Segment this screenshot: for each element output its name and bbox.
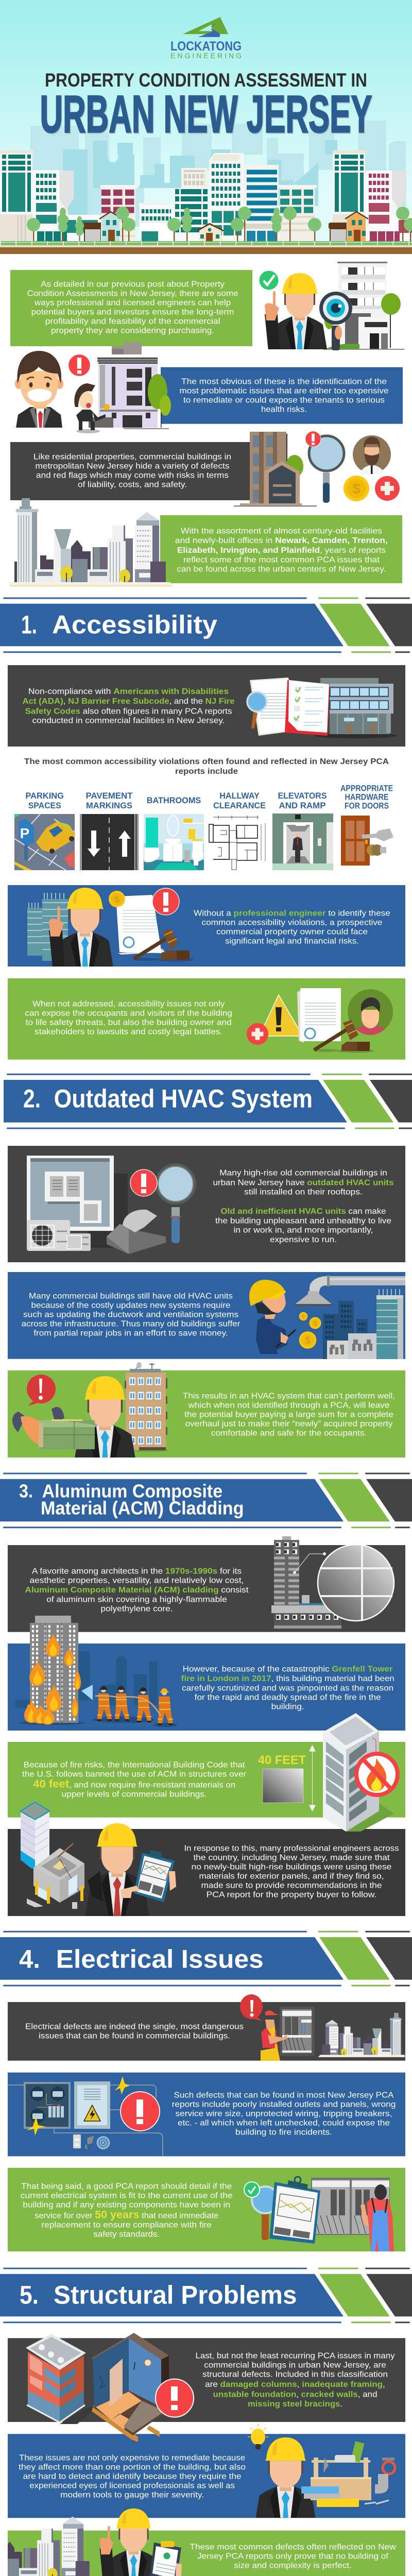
- panel: outdated HVAC: the building unpleasant and unhealthy to live: [215, 1216, 391, 1225]
- section header 5: 5.: [20, 2281, 39, 2310]
- section header 5: Structural Problems: [54, 2281, 297, 2310]
- icon: parking lot: P: [20, 825, 29, 841]
- panel: old HVAC units: across the infrastructure. Thus many old buildings suffer: [22, 1319, 241, 1328]
- panel: urban centers: Elizabeth, Irvington, and Plainfield , years of reports: [177, 546, 386, 555]
- section header 4: Electrical Issues: [56, 1944, 264, 1973]
- section header 3: [0, 1472, 412, 1528]
- blue striped building: [244, 165, 279, 241]
- panel: outdated HVAC: Many high-rise old commercial buildings in: [219, 1168, 387, 1177]
- panel: engineers respond: PCA report for the property buyer to follow.: [207, 1890, 376, 1899]
- left tower group: [0, 150, 101, 241]
- illustration: building, magnifier and icons: $: [352, 481, 360, 497]
- illustration: building, magnifier and icons: [234, 431, 400, 507]
- panel: defects and red flags: and red flags which may come with risks in terms: [36, 471, 229, 480]
- panel: without a professional engineer: [8, 885, 405, 967]
- item: appropriate hardware for doors: HARDWARE: [345, 792, 388, 802]
- section header 3: 3.: [19, 1481, 33, 1502]
- panel: structural problems: missing steel bracings .: [248, 2400, 342, 2409]
- panel: most common defects: size and complexity is perfect.: [234, 2561, 352, 2570]
- panel: hard to detect: are hard to detect and identify because they require the: [23, 2472, 242, 2481]
- section header 3: Aluminum Composite: [42, 1481, 222, 1502]
- panel: defects in PCA: building to fire incidents.: [235, 2128, 332, 2137]
- panel: ACM cladding: A favorite among architects in the 1970s-1990s for its: [32, 1567, 242, 1575]
- illustration: engineer inspecting building: [260, 262, 404, 350]
- panel: non-compliance: conducted in commercial facilities in New Jersey.: [32, 717, 225, 725]
- heading: common accessibility violations: [24, 757, 389, 776]
- icon: door and hardware: [341, 816, 393, 866]
- panel: defects in PCA: Such defects that can be found in most New Jersey PCA: [174, 2091, 394, 2099]
- panel: Grenfell Tower: However, because of the catastrophic Grenfell Tower: [183, 1665, 393, 1673]
- icon: elevator: [272, 814, 333, 870]
- icon: bathroom: [144, 814, 204, 870]
- panel: Grenfell Tower: building.: [271, 1702, 304, 1711]
- panel: defects in PCA: [8, 2073, 405, 2156]
- section header 1: 1.: [21, 610, 37, 639]
- panel: hard to detect: modern tools to gauge their severity.: [60, 2490, 204, 2499]
- panel: defects and red flags: of liability, costs, and safety.: [78, 480, 187, 489]
- item: bathrooms: [144, 795, 204, 870]
- panel: good PCA report: current electrical system is fit to the current use of the: [21, 2191, 233, 2200]
- panel: defects in PCA: service wire size, unprotected wiring, tripping breakers,: [175, 2109, 392, 2118]
- panel: when not addressed: to life safety threats, but also the building owner and: [26, 1018, 232, 1027]
- panel: non-compliance: Non-compliance with Americans with Disabilities: [28, 687, 229, 696]
- illustration: room with cracks and warning: [92, 2333, 194, 2442]
- icon: road arrows: [80, 814, 138, 870]
- panel: defects in PCA: etc. - all which when left unchecked, could expose the: [178, 2119, 390, 2127]
- panel: engineers respond: [8, 1802, 405, 1923]
- panel: without a professional engineer: Without a professional engineer to identify these: [194, 909, 390, 918]
- panel: structural problems: [8, 2334, 405, 2424]
- panel: outdated HVAC: [8, 1146, 405, 1262]
- skyline: far layer: [30, 121, 406, 227]
- section header 2: 2.: [23, 1084, 41, 1113]
- house: cream centre: [197, 223, 224, 243]
- panel: outdated HVAC: still installed on their rooftops.: [244, 1188, 363, 1196]
- illustration: city skyline: [10, 498, 173, 587]
- panel: structural problems: commercial buildings in urban New Jersey, are: [204, 2361, 386, 2370]
- panel: defects and red flags: Like residential properties, commercial buildings in: [33, 452, 231, 461]
- section header 5: [0, 2268, 412, 2323]
- panel: old HVAC units: Many commercial buildings still have old HVAC units: [29, 1292, 233, 1300]
- panel: 40 feet code: 40 feet, and now require fire-resistant materials on: [33, 1778, 235, 1790]
- panel: ACM cladding: Aluminum Composite Material (ACM) cladding consist: [25, 1586, 249, 1595]
- heading: common accessibility violations: The most common accessibility violations often found and reflected in New Jersey PCA: [24, 757, 389, 766]
- panel: most common defects: Jersey PCA reports only prove that no building of: [197, 2552, 389, 2561]
- panel: hard to detect: These issues are not only expensive to remediate because: [19, 2453, 245, 2462]
- panel: when not addressed: When not addressed, accessibility issues not only: [32, 999, 225, 1008]
- panel: electrical defects: issues that can be found in commercial buildings.: [39, 2031, 230, 2040]
- panel: old HVAC units: from partial repair jobs in an effort to save money.: [33, 1329, 228, 1337]
- illustration: office and checklist: [247, 677, 397, 738]
- panel: 40 feet code: Because of fire risks, the International Building Code that: [24, 1760, 245, 1769]
- illustration: report, panels and inspector: [244, 2177, 394, 2251]
- illustration: tower on fire and firefighters: [15, 1616, 177, 1727]
- panel: non-compliance: [8, 665, 405, 747]
- item: parking spaces: [14, 791, 75, 870]
- illustration: man with mask and worried owner: [15, 342, 171, 433]
- panel: without a professional engineer: common accessibility violations, a prospective: [202, 918, 383, 927]
- sample cladding panel: [263, 1769, 303, 1803]
- right tower group: [333, 150, 412, 241]
- panel: non-compliance: Safety Codes also often figures in many PCA reports: [25, 707, 232, 716]
- trees: [27, 207, 412, 244]
- section header 1: Accessibility: [52, 610, 217, 639]
- panel: intro green: ways professional and licensed engineers can help: [34, 298, 231, 307]
- item: elevators and ramp: [272, 791, 333, 870]
- illustration: isometric tower, no fire symbol: [323, 1713, 398, 1832]
- panel: most obvious issues: [161, 367, 403, 424]
- panel: most obvious issues: health risks.: [261, 405, 307, 414]
- panel: intro green: property they are considering purchasing.: [51, 326, 214, 335]
- panel: when not addressed: stakeholders to lawsuits and costly legal battles.: [35, 1027, 222, 1036]
- illustration: warning, document and gavel: [247, 988, 393, 1053]
- panel: outdated HVAC: urban New Jersey have outdated HVAC units: [213, 1178, 394, 1187]
- panel: Grenfell Tower: for the rapid and deadly spread of the fire in the: [195, 1693, 381, 1702]
- section header 4: 4.: [19, 1944, 40, 1973]
- illustration: electrician and city: [240, 1994, 405, 2061]
- panel: hard to detect: they affect more than one portion of the building, but also: [19, 2463, 246, 2471]
- panel: old HVAC units: such as updating the ductwork and ventilation systems: [23, 1310, 238, 1319]
- panel: poorly performing HVAC: This results in an HVAC system that can’t perform well,: [183, 1392, 395, 1400]
- panel: most obvious issues: The most obvious of these is the identification of the: [181, 377, 387, 386]
- illustration: engineer, money and building: [12, 1362, 169, 1458]
- panel: poorly performing HVAC: [8, 1362, 405, 1458]
- item: bathrooms: BATHROOMS: [147, 795, 201, 805]
- panel: defects and red flags: [10, 442, 250, 500]
- beige building right: [279, 185, 317, 241]
- white centre building: [139, 203, 174, 241]
- section header 1: [0, 598, 412, 653]
- tall white building: [209, 153, 244, 241]
- panel: structural problems: structural defects. Included in this classification: [202, 2370, 388, 2379]
- panel: defects in PCA: reports include poorly installed outlets and panels, wrong: [172, 2100, 396, 2109]
- illustration: engineer and tools: [248, 2424, 397, 2518]
- item: appropriate hardware for doors: [340, 784, 393, 866]
- panel: engineers respond: no newly-built high-rise buildings were using these: [192, 1862, 392, 1871]
- panel: poorly performing HVAC: the potential buyer paying a large sum for a complete: [184, 1410, 393, 1419]
- illustration: engineer and legal document: [27, 888, 194, 967]
- panel: electrical defects: [8, 1994, 405, 2061]
- panel: urban centers: reflect some of the most common PCA issues that: [183, 555, 380, 564]
- panel: engineers respond: materials for exterior panels, and if they find so,: [199, 1872, 384, 1880]
- logo: Lockatong top: [170, 17, 242, 60]
- panel: Grenfell Tower: [8, 1616, 405, 1731]
- panel: engineers respond: the country, including New Jersey, made sure that: [194, 1853, 390, 1862]
- item: appropriate hardware for doors: APPROPRIATE: [340, 784, 393, 793]
- illustration: engineer with checklist and city: [8, 2509, 182, 2576]
- logo: Lockatong top: LOCKATONG: [170, 39, 242, 54]
- illustration: isometric building: [26, 2334, 98, 2424]
- panel: good PCA report: service for over 50 years that need immediate: [35, 2209, 218, 2221]
- magenta window building: [100, 185, 139, 241]
- panel: structural problems: unstable foundation , cracked walls , and: [213, 2390, 377, 2399]
- panel: ACM cladding: polyethylene core.: [101, 1605, 173, 1614]
- panel: good PCA report: safety standards.: [93, 2230, 160, 2239]
- item: pavement markings: PAVEMENT: [85, 791, 133, 801]
- panel: urban centers: With the assortment of almost century-old facilities: [181, 527, 382, 535]
- panel: engineers respond: made sure to provide recommendations in the: [201, 1881, 382, 1890]
- panel: good PCA report: That being said, a good PCA report should detail if the: [21, 2182, 232, 2191]
- item: parking spaces: SPACES: [28, 801, 61, 810]
- panel: without a professional engineer: significant legal and financial risks.: [225, 937, 359, 945]
- panel: engineers respond: In response to this, many professional engineers across: [184, 1844, 399, 1853]
- item: elevators and ramp: ELEVATORS: [278, 791, 327, 801]
- item: hallway clearance: HALLWAY: [219, 791, 260, 801]
- panel: urban centers: can be found across the urban centers of New Jersey.: [177, 565, 386, 573]
- panel: poorly performing HVAC: which when not identified through a PCA, will leave: [187, 1401, 390, 1410]
- illustration: building and cladding lens: [271, 1536, 394, 1629]
- hero: sky and city: [0, 0, 412, 254]
- icon: parking lot: [14, 814, 75, 870]
- section header 2: [4, 1074, 412, 1129]
- panel: Grenfell Tower: carefully scrutinized and was pinpointed as the reason: [182, 1684, 393, 1692]
- panel: 40 feet code: upper levels of commercial buildings.: [62, 1790, 207, 1799]
- panel: most obvious issues: to remediate or could expose the tenants to serious: [183, 396, 385, 404]
- panel: intro green: profitability and feasibility of the commercial: [45, 317, 220, 326]
- item: hallway clearance: [209, 791, 266, 870]
- label: 40 feet: 40 FEET: [258, 1753, 306, 1767]
- heading: common accessibility violations: reports include: [175, 767, 238, 776]
- panel: when not addressed: can expose the occupants and visitors of the building: [25, 1009, 232, 1018]
- panel: electrical defects: Electrical defects are indeed the single, most dangerous: [25, 2022, 244, 2031]
- panel: 40 feet code: [8, 1742, 405, 1818]
- panel: poorly performing HVAC: comfortable and safe for the occupants.: [211, 1429, 367, 1437]
- panel: ACM cladding: [8, 1536, 405, 1632]
- item: hallway clearance: CLEARANCE: [213, 801, 266, 810]
- house: orange: [329, 212, 368, 241]
- teal building: [174, 188, 208, 241]
- panel: intro green: potential buyers and investors ensure the long-term: [31, 308, 234, 316]
- panel: ACM cladding: aesthetic properties, versatility, and relatively low cost,: [30, 1577, 244, 1585]
- panel: intro green: [10, 270, 252, 346]
- panel: old HVAC units: [8, 1272, 406, 1360]
- item: pavement markings: MARKINGS: [86, 801, 132, 810]
- panel: ACM cladding: of aluminum skin covering a highly-flammable: [46, 1595, 227, 1604]
- skyline: near layer: [63, 140, 337, 227]
- illustration: electric panels and warning: [8, 2076, 163, 2156]
- panel: Grenfell Tower: fire in London in 2017 , this building material had been: [181, 1674, 394, 1683]
- item: parking spaces: PARKING: [25, 791, 64, 801]
- panel: good PCA report: building and if any existing components have been in: [23, 2200, 230, 2209]
- icon: floor plan: [209, 816, 265, 870]
- panel: hard to detect: experienced eyes of licensed professionals as well as: [29, 2481, 235, 2490]
- panel: most common defects: These most common defects often reflected on New: [190, 2543, 396, 2551]
- panel: good PCA report: replacement to ensure compliance with fire: [41, 2221, 212, 2229]
- panel: poorly performing HVAC: overhaul just to make their “newly” acquired property: [185, 1419, 392, 1428]
- panel: urban centers: [160, 515, 402, 583]
- panel: most obvious issues: most problematic issues that are either too expensive: [179, 386, 389, 395]
- panel: structural problems: are damaged columns , inadequate framing ,: [205, 2380, 385, 2389]
- section header 2: Outdated HVAC System: [54, 1084, 313, 1113]
- panel: good PCA report: [8, 2168, 405, 2251]
- item: pavement markings: [80, 791, 138, 870]
- panel: intro green: As detailed in our previous post about Property: [41, 280, 225, 289]
- panel: outdated HVAC: in or work in, and more importantly,: [234, 1226, 373, 1234]
- panel: urban centers: and newly-built offices in Newark, Camden, Trenton,: [175, 536, 388, 545]
- title: PROPERTY CONDITION ASSESSMENT IN: [45, 70, 367, 91]
- logo: Lockatong top: ENGINEERING: [170, 52, 242, 60]
- ground and fence: [0, 241, 412, 254]
- panel: without a professional engineer: commercial property owner could face: [216, 927, 368, 936]
- panel: most common defects: [0, 2504, 405, 2576]
- illustration: worker, duct and buildings: [249, 1275, 406, 1360]
- panel: intro green: Condition Assessments in New Jersey, there are some: [27, 289, 238, 298]
- panel: outdated HVAC: expensive to run.: [270, 1235, 337, 1244]
- panel: non-compliance: Act (ADA), NJ Barrier Free Subcode , and the NJ Fire: [23, 697, 235, 706]
- grey building top: [181, 168, 208, 189]
- item: appropriate hardware for doors: FOR DOORS: [345, 801, 389, 811]
- panel: outdated HVAC: Old and inefficient HVAC units can make: [220, 1207, 386, 1216]
- illustration: construction and engineer with report: [21, 1802, 176, 1923]
- panel: old HVAC units: because of the costly updates new systems require: [31, 1301, 231, 1310]
- section header 3: Material (ACM) Cladding: [41, 1497, 244, 1518]
- illustration: rooftop HVAC: [27, 1156, 196, 1254]
- panel: hard to detect: [8, 2424, 405, 2518]
- panel: 40 feet code: the U.S. follows banned the use of ACM in structures over: [22, 1770, 247, 1778]
- panel: structural problems: Last, but not the least recurring PCA issues in many: [196, 2352, 394, 2361]
- section header 4: [0, 1931, 412, 1987]
- house: blue: [83, 212, 123, 241]
- panel: when not addressed: [8, 978, 405, 1060]
- panel: defects and red flags: metropolitan New Jersey hide a variety of defects: [35, 462, 230, 470]
- arrow: height marker: [310, 1745, 315, 1811]
- item: elevators and ramp: AND RAMP: [279, 801, 325, 810]
